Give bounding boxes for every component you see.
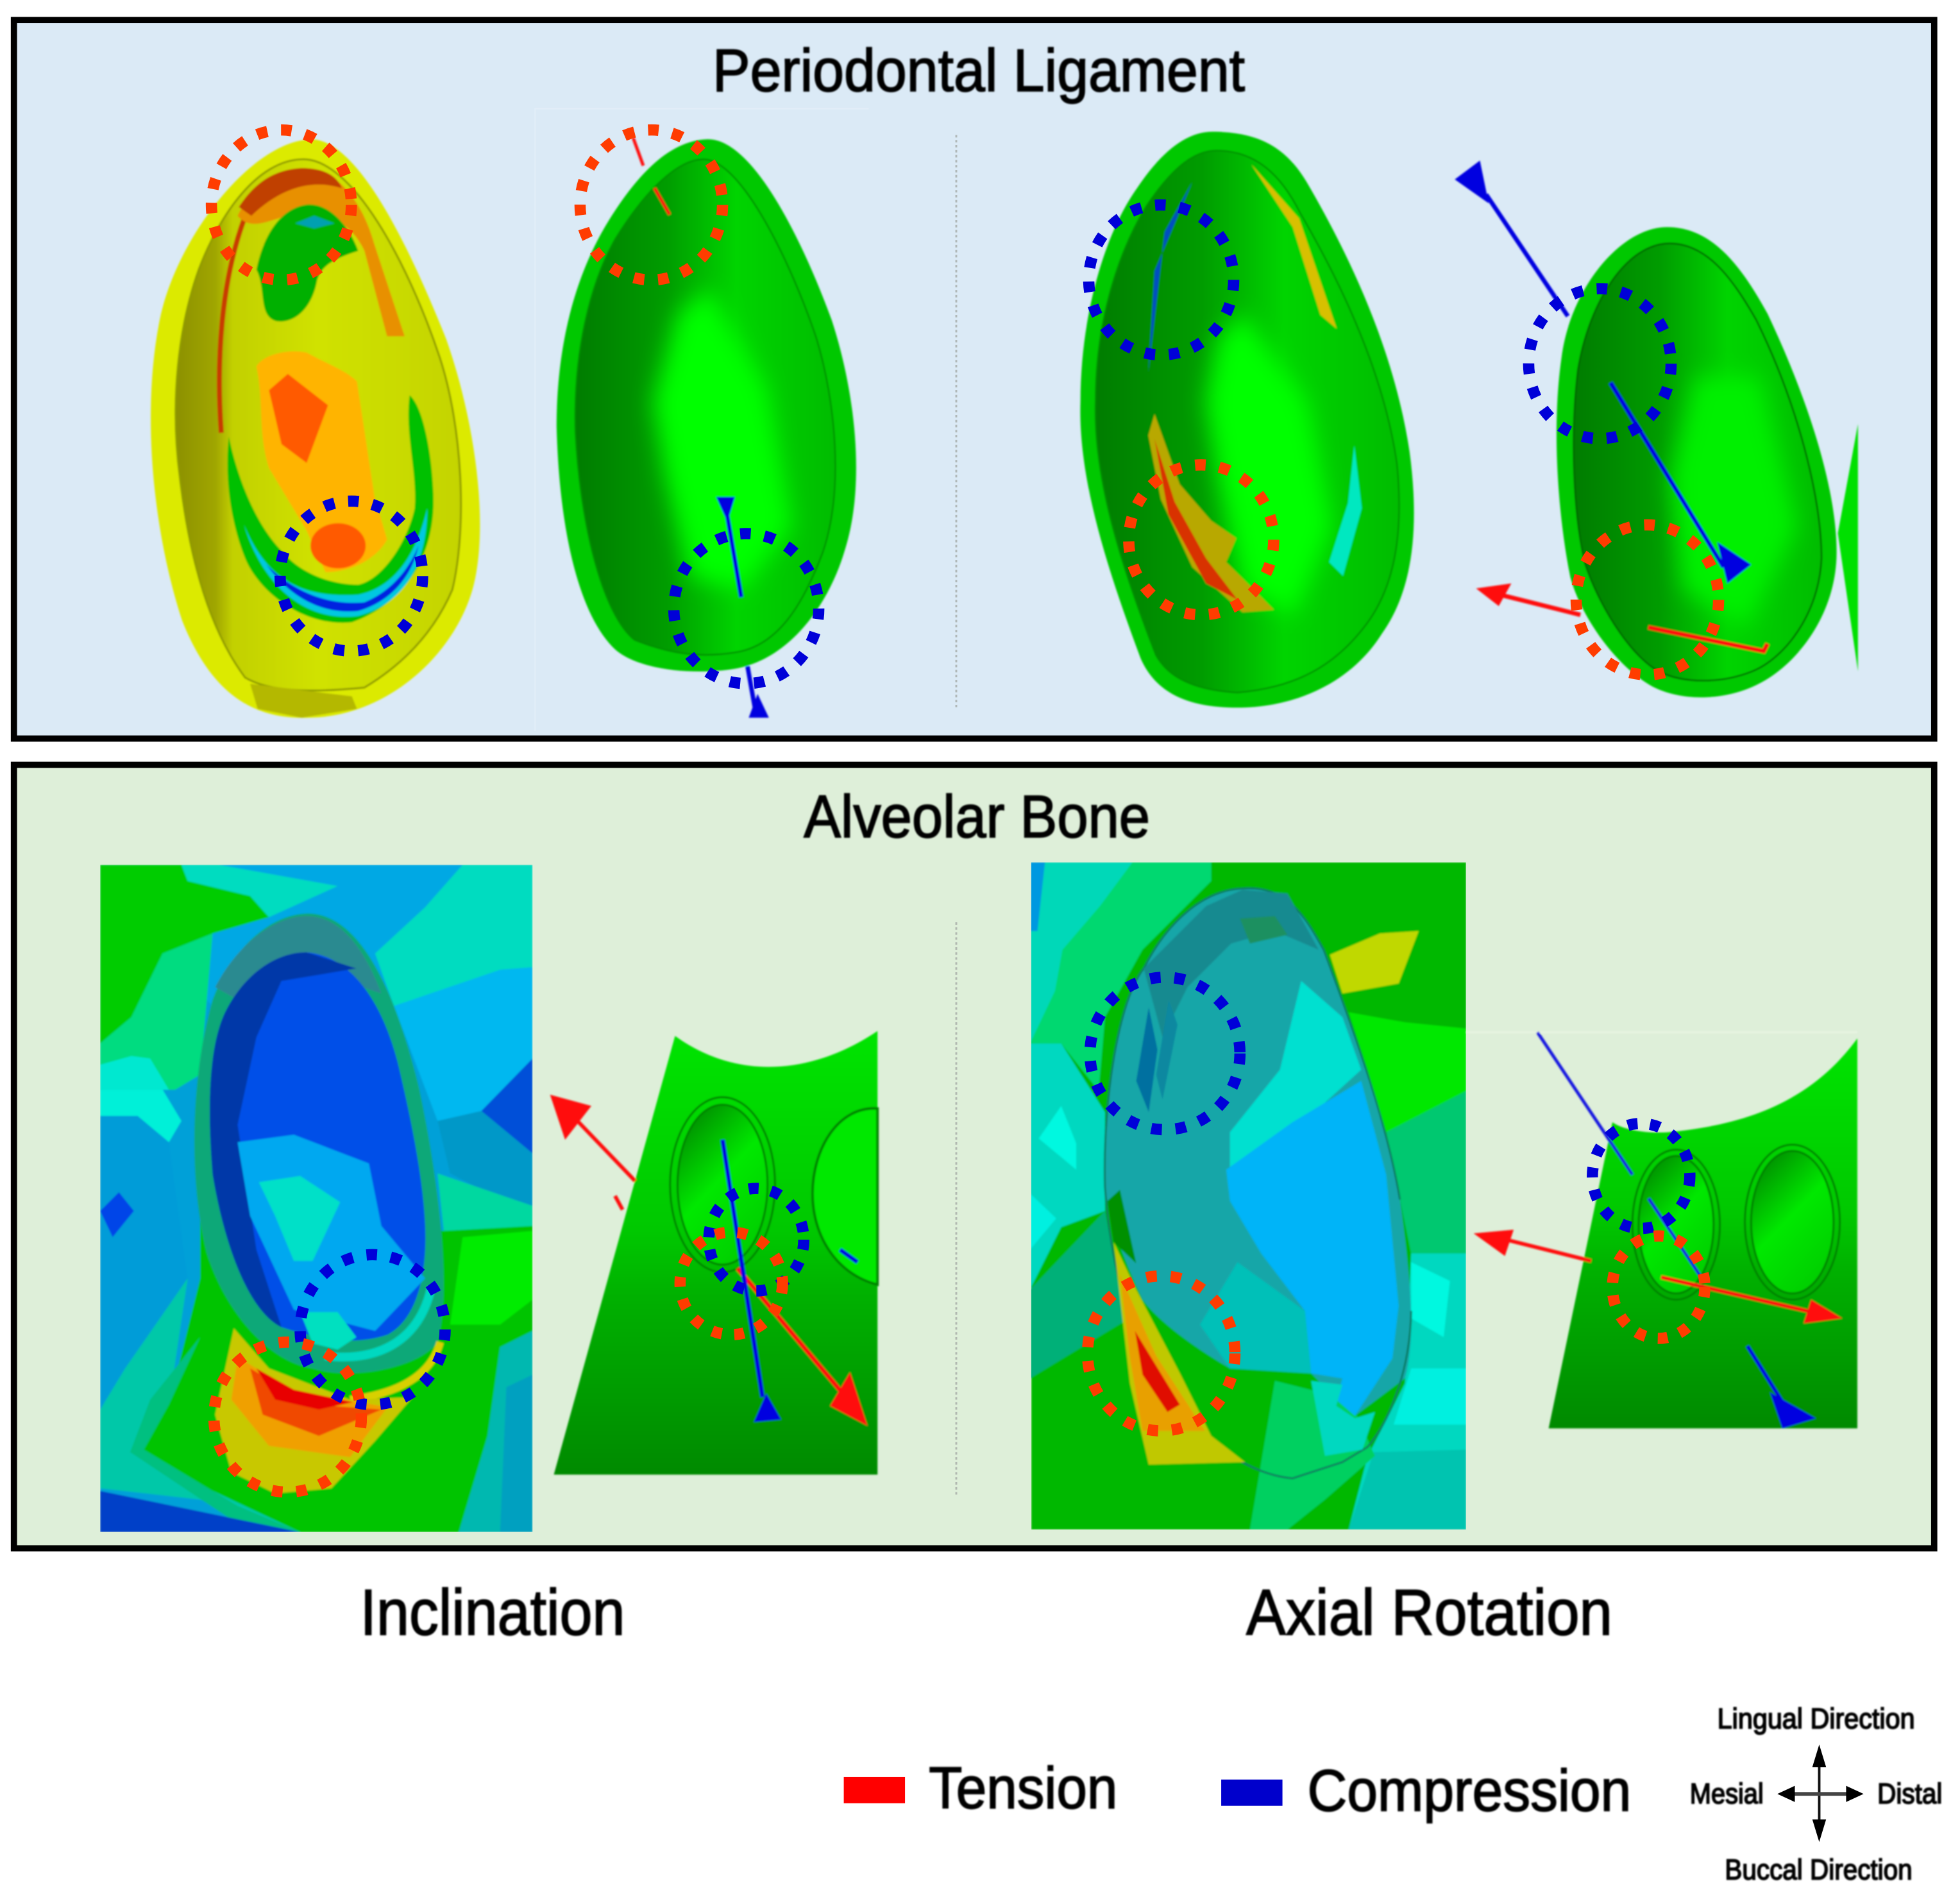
arrow: tension right (1661, 1277, 1843, 1324)
dotted circle: tension region (580, 130, 723, 280)
arrow: compression lower (1610, 383, 1751, 584)
dotted circle: tension region (212, 130, 351, 280)
dotted circle: tension region (1129, 465, 1274, 615)
dotted circle: compression region (1528, 289, 1671, 439)
arrow: tension left (1474, 1229, 1591, 1261)
legend: tension (844, 1756, 1117, 1821)
dotted circle: tension region (1612, 1236, 1705, 1338)
column label: inclination: Inclination (360, 1576, 625, 1649)
dotted circle: tension region (680, 1232, 782, 1335)
dotted circle: compression region (280, 501, 423, 651)
panel: alveolar bone (14, 765, 1934, 1548)
bone vector view: axial rotation (1466, 1033, 1857, 1428)
contour image: inclination bone (100, 864, 532, 1532)
tooth: axial rotation contour (green) (1080, 131, 1414, 707)
arrow: tension upper left (550, 1095, 635, 1210)
arrow: compression upper (1455, 160, 1568, 316)
arrow: compression upper (1537, 1033, 1701, 1277)
bone vector view: inclination (550, 1031, 877, 1474)
dotted circle: compression region (1090, 977, 1240, 1130)
arrow: compression lower (1747, 1346, 1816, 1428)
legend: tension: Tension (929, 1756, 1117, 1821)
dotted circle: compression region (709, 1188, 804, 1291)
panel: periodontal ligament (14, 20, 1934, 739)
tooth: inclination vector view (green) (557, 138, 856, 718)
dotted circle: tension region (1088, 1276, 1235, 1431)
heading: periodontal ligament: Periodontal Ligament (713, 37, 1245, 104)
dotted circle: tension region (1576, 525, 1719, 675)
column label: axial rotation: Axial Rotation (1246, 1576, 1612, 1649)
arrow: tension (1476, 584, 1768, 651)
dotted circle: compression region (1592, 1124, 1690, 1228)
contour image: axial rotation bone (1030, 863, 1466, 1530)
direction compass: Buccal Direction (1725, 1854, 1913, 1886)
direction compass: Lingual Direction (1718, 1703, 1915, 1735)
tooth: axial rotation vector view (green) (1455, 160, 1858, 697)
arrow: compression (723, 1140, 858, 1422)
dotted circle: tension region (214, 1342, 361, 1492)
tooth: inclination contour (yellow) (151, 139, 480, 718)
legend: compression: Compression (1308, 1758, 1631, 1824)
dotted circle: compression region (1089, 205, 1234, 355)
direction compass (1690, 1703, 1942, 1886)
dotted circle: compression region (674, 534, 819, 684)
direction compass: Mesial (1690, 1778, 1764, 1810)
direction compass: Distal (1877, 1778, 1942, 1810)
dotted circle: compression region (300, 1254, 445, 1404)
heading: alveolar bone: Alveolar Bone (804, 783, 1150, 850)
arrow: tension lower right (738, 1269, 868, 1426)
